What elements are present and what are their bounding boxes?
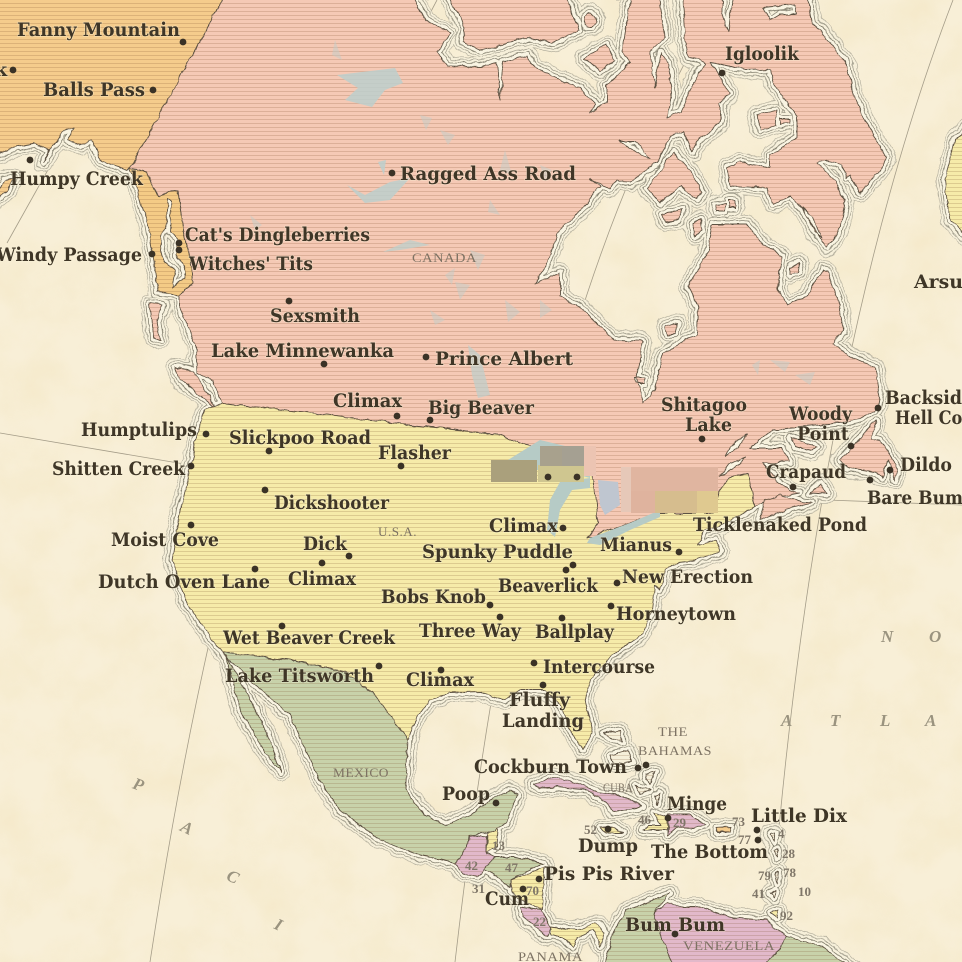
country reference numbers: 42 [465,858,478,873]
place name labels: Climax [288,568,357,590]
region: Alaska [0,0,228,205]
region: Nova Scotia [760,495,812,520]
ocean lettering: A [780,711,792,730]
place name labels: Poop [442,783,490,805]
country reference numbers: 22 [533,914,546,929]
place name labels: Landing [502,710,584,732]
region: Newfoundland [840,420,898,480]
place name labels: Pis Pis River [544,863,675,885]
small map labels [333,250,775,962]
lake: Winnipeg [468,345,490,398]
region: Panama [550,923,605,948]
place name labels: Humpy Creek [10,168,144,190]
place name labels: Moist Cove [111,529,219,551]
place name labels: Ragged Ass Road [400,163,576,185]
pixelated censor block: west [491,446,596,482]
place name labels: Dick [303,533,348,555]
place name labels: Big Beaver [428,397,535,419]
ocean lettering: P [129,774,147,796]
country reference numbers [465,812,811,929]
place name labels: Sexsmith [270,305,360,327]
ocean lettering: L [879,711,890,730]
Great Lakes [500,440,660,545]
place name labels: Windy Passage [0,244,142,266]
place name labels: Witches' Tits [188,253,313,275]
region: Venezuela [653,903,787,962]
place name labels: Woody [788,403,853,425]
place name labels: Igloolik [725,43,800,65]
region: Trinidad [770,910,778,918]
country reference numbers: 4 [778,826,785,841]
place name labels: Point [797,423,849,445]
place name labels: Bobs Knob [381,586,486,608]
ocean lettering: O [929,627,941,646]
region: Mexico [222,652,518,863]
region: Belize [487,828,498,854]
country reference numbers: 92 [780,908,793,923]
small map labels: CANADA [412,250,477,265]
place name labels: Cum [485,888,529,910]
place name labels: Humptulips [81,419,197,441]
place name labels: Lake Minnewanka [211,340,394,362]
place name labels: Little Dix [751,805,848,827]
country reference numbers: 41 [752,886,765,901]
region: Haiti [643,813,667,830]
region: Bahamas islands [603,731,779,898]
region: Colombia [603,893,680,962]
country reference numbers: 29 [673,815,686,830]
small map labels: U.S.A. [378,524,417,539]
country reference numbers: 78 [783,865,796,880]
ocean lettering: I [271,914,287,935]
place name labels: Three Way [419,620,522,642]
place name labels: Intercourse [543,656,655,678]
place name labels: Climax [333,390,403,412]
small map labels: BAHAMAS [638,743,712,758]
ocean lettering: A [924,711,936,730]
country reference numbers: 70 [526,883,539,898]
lakes: scattered northern lakes [250,40,815,385]
region: Cuba [533,777,643,812]
place name labels: Wet Beaver Creek [222,627,396,649]
region: Guyana [750,937,860,962]
place name labels: Dildo [900,454,952,476]
lake: Athabasca [383,240,430,252]
place name labels: The Bottom [651,841,768,863]
region: Baja California [226,655,281,772]
region: Prince Edward Island [810,483,827,494]
ocean lettering: T [830,711,841,730]
country reference numbers: 13 [492,838,506,853]
place name labels: Crapaud [766,461,846,483]
place name labels: Cockburn Town [474,756,627,778]
region: Costa Rica [520,907,550,937]
region: Puerto Rico [715,827,732,832]
region: Guatemala [455,835,495,877]
region: Greenland edge [945,120,962,245]
region: United States [172,403,755,750]
place name labels: Cat's Dingleberries [185,224,370,246]
region: Alaska panhandle [130,168,193,295]
region: Jamaica [600,827,623,833]
place name labels: Spunky Puddle [422,541,573,563]
place name labels: Shitten Creek [52,458,186,480]
place name labels: Mianus [600,534,672,556]
place name labels: Fanny Mountain [17,19,180,41]
ocean lettering [129,627,941,935]
place name labels: Ticklenaked Pond [693,514,867,536]
country reference numbers: 52 [584,822,597,837]
region: Canada [130,0,887,537]
place name labels: Shitagoo [661,394,747,416]
ocean lettering: A [177,816,196,839]
ocean lettering: N [880,627,894,646]
country reference numbers: 79 [758,868,772,883]
place name labels: Dutch Oven Lane [98,571,270,593]
place name labels: Balls Pass [43,79,145,101]
country reference numbers: 46 [638,812,652,827]
country reference numbers: 47 [505,860,518,875]
country reference numbers: 73 [732,814,746,829]
place name labels: Horneytown [616,603,736,625]
place name labels: Bum Bum [625,914,725,936]
small map labels: VENEZUELA [683,938,775,953]
place name labels: Beaverlick [498,575,599,597]
country reference numbers: 31 [472,881,485,896]
region: Dominican Republic [668,815,705,835]
lake: Huron [598,480,620,515]
place name labels: Dickshooter [274,492,390,514]
country reference numbers: 10 [798,884,811,899]
place name labels: Lake Titsworth [225,665,374,687]
place name labels: Flasher [378,442,452,464]
country reference numbers: 77 [738,832,752,847]
place name labels: Climax [489,515,559,537]
region: Nicaragua [510,867,545,910]
place name labels: Slickpoo Road [229,427,371,449]
lake: Erie [587,510,660,545]
place name labels: Prince Albert [435,348,573,370]
lake: Great Slave [347,160,410,203]
place name labels: New Erection [622,566,753,588]
small map labels: MEXICO [333,765,389,780]
country reference numbers: 28 [782,846,796,861]
place name labels: Ballplay [535,621,615,643]
small map labels: THE [658,724,688,739]
small map labels: CUBA [603,780,633,795]
place name labels: Minge [667,793,727,815]
region: Honduras [483,857,543,887]
lake: Michigan [547,478,590,537]
lakes [250,40,815,398]
place name labels: Climax [406,669,475,691]
place name labels: Dump [578,835,638,857]
place name labels: Fluffy [509,689,571,711]
lake: Great Bear [337,68,403,107]
place name labels: Lake [685,414,732,436]
lake: Superior [500,440,590,478]
pixelated censor block: east [621,467,718,513]
ocean lettering: C [224,866,243,888]
